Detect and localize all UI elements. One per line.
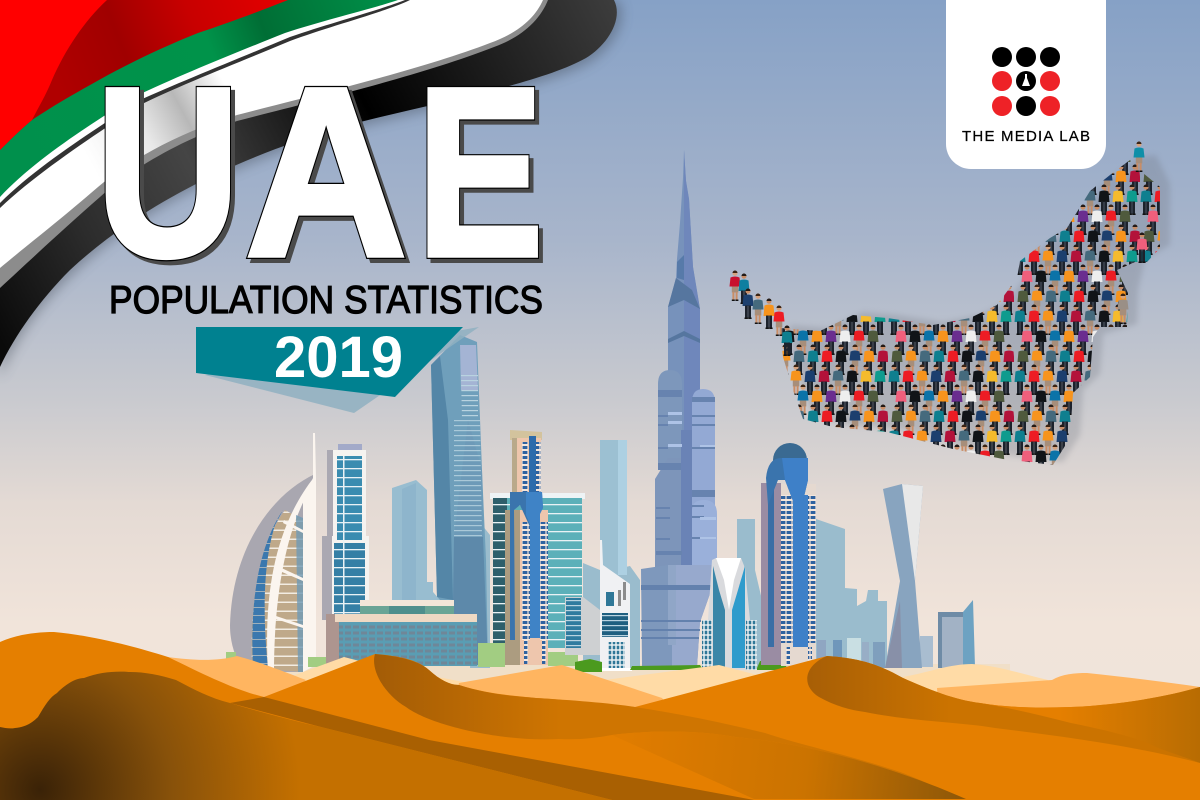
low-rise building <box>326 600 477 666</box>
sand ground <box>250 664 1010 704</box>
blue dome tower <box>761 443 816 666</box>
small podium <box>565 597 600 655</box>
title: UAE: E <box>417 37 543 306</box>
outlying people on the western tip <box>730 270 792 356</box>
white and blue twin tower <box>702 558 757 670</box>
title: UAE: U <box>96 37 240 306</box>
background skyline <box>470 519 887 668</box>
copper and blue tower <box>505 430 548 665</box>
right tower <box>938 600 975 668</box>
title: UAE <box>96 37 547 311</box>
teal glass tower <box>490 493 585 648</box>
logo card <box>946 0 1106 169</box>
logo card: THE MEDIA LAB <box>962 128 1090 145</box>
crowd shadow <box>790 155 1170 462</box>
banner: 2019: 2019 <box>274 325 403 390</box>
title: UAE: U <box>100 41 244 310</box>
Burj Khalifa <box>641 150 717 667</box>
crowd of people forming UAE map <box>730 150 1170 470</box>
tall glass tower <box>431 335 488 665</box>
glass tower <box>322 444 369 620</box>
subtitle: POPULATION STATISTICS <box>109 279 543 322</box>
title: UAE: U <box>96 37 240 306</box>
title: UAE: A <box>250 43 411 311</box>
outlying people at the north-eastern tip <box>1118 142 1148 324</box>
small foreground towers <box>817 636 933 668</box>
bushes <box>575 659 787 672</box>
sand dunes foreground <box>0 632 1200 800</box>
title: UAE: E <box>417 37 543 306</box>
title: UAE: E <box>421 41 547 310</box>
banner: 2019 <box>196 325 479 413</box>
Emirates tower <box>598 540 632 671</box>
title: UAE: A <box>246 39 407 307</box>
title: UAE: A <box>246 39 407 307</box>
stepped blue tower <box>392 480 440 605</box>
lawn <box>226 643 578 667</box>
twisted tower <box>883 484 923 668</box>
flag ribbon <box>0 0 622 378</box>
Burj Al Arab <box>230 433 316 672</box>
light tower <box>600 440 627 575</box>
logo dots <box>992 47 1060 116</box>
back dunes <box>160 656 1200 740</box>
